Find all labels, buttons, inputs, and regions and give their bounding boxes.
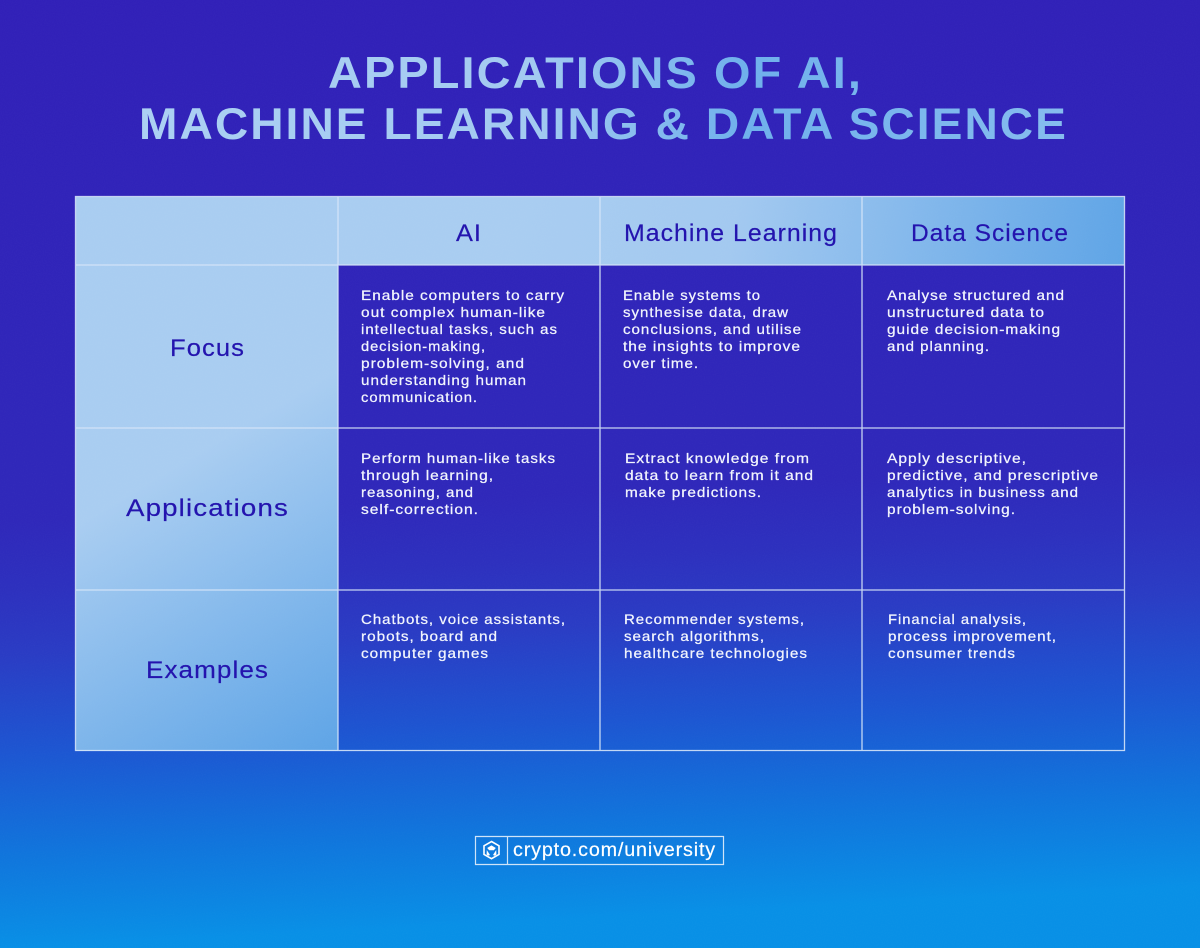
column heading: AI: AI <box>456 220 482 247</box>
cell: AI focus: understanding human <box>361 372 527 388</box>
cell: AI examples: Chatbots, voice assistants, <box>361 611 566 627</box>
row heading: Examples: Examples <box>146 657 269 684</box>
row heading: Applications: Applications <box>126 495 289 522</box>
cell: data science examples: Financial analysis, <box>888 611 1027 627</box>
cell: data science applications: analytics in business and <box>887 484 1079 500</box>
cell: machine learning focus: over time. <box>623 355 699 371</box>
cell: data science examples: consumer trends <box>888 645 1016 661</box>
cell: data science applications <box>887 450 1099 517</box>
footer url: crypto.com/university <box>513 840 716 861</box>
cell: machine learning examples: healthcare technologies <box>624 645 808 661</box>
cell: data science focus: Analyse structured and <box>887 287 1065 303</box>
row heading: Focus: Focus <box>170 335 245 362</box>
cell: AI applications <box>361 450 556 517</box>
cell: machine learning applications: make predictions. <box>625 484 762 500</box>
cell: AI applications: Perform human-like tasks <box>361 450 556 466</box>
cell: AI focus <box>361 287 565 405</box>
cell: machine learning applications <box>625 450 814 500</box>
column heading: Data Science: Data Science <box>911 220 1069 247</box>
cell: machine learning applications: Extract knowledge from <box>625 450 810 466</box>
cell: machine learning focus: the insights to improve <box>623 338 801 354</box>
cell: data science focus: and planning. <box>887 338 990 354</box>
cell: data science focus <box>887 287 1065 354</box>
cell: AI focus: problem-solving, and <box>361 355 525 371</box>
comparison table <box>76 196 1124 751</box>
cell: data science focus: guide decision-making <box>887 321 1061 337</box>
cell: data science applications: problem-solving. <box>887 501 1016 517</box>
title: APPLICATIONS OF AI, <box>328 49 863 98</box>
cell: data science examples: process improvement, <box>888 628 1057 644</box>
cell: machine learning focus: Enable systems to <box>623 287 761 303</box>
cell: data science examples <box>888 611 1057 661</box>
icon: crypto.com logo <box>484 842 499 859</box>
column heading: Machine Learning: Machine Learning <box>624 220 838 247</box>
cell: machine learning examples: search algorithms, <box>624 628 765 644</box>
cell: AI applications: self-correction. <box>361 501 479 517</box>
row headers column <box>76 265 338 751</box>
title: MACHINE LEARNING & DATA SCIENCE <box>139 100 1068 149</box>
table grid lines <box>76 196 1124 750</box>
cell: machine learning focus: synthesise data, draw <box>623 304 789 320</box>
cell: data science applications: predictive, and prescriptive <box>887 467 1099 483</box>
cell: AI examples: robots, board and <box>361 628 498 644</box>
cell: AI applications: reasoning, and <box>361 484 474 500</box>
footer badge <box>476 836 724 864</box>
cell: AI focus: out complex human-like <box>361 304 546 320</box>
cell: machine learning focus: conclusions, and utilise <box>623 321 802 337</box>
title <box>139 49 1068 149</box>
column header band <box>76 197 1124 265</box>
cell: machine learning examples <box>624 611 808 661</box>
cell: AI examples: computer games <box>361 645 489 661</box>
cell: AI focus: decision-making, <box>361 338 486 354</box>
cell: AI focus: intellectual tasks, such as <box>361 321 558 337</box>
cell: machine learning applications: data to learn from it and <box>625 467 814 483</box>
cell: AI focus: Enable computers to carry <box>361 287 565 303</box>
cell: machine learning examples: Recommender systems, <box>624 611 805 627</box>
cell: AI focus: communication. <box>361 389 478 405</box>
cell: AI applications: through learning, <box>361 467 494 483</box>
cell: machine learning focus <box>623 287 802 371</box>
cell: data science applications: Apply descriptive, <box>887 450 1027 466</box>
cell: data science focus: unstructured data to <box>887 304 1045 320</box>
cell: AI examples <box>361 611 566 661</box>
